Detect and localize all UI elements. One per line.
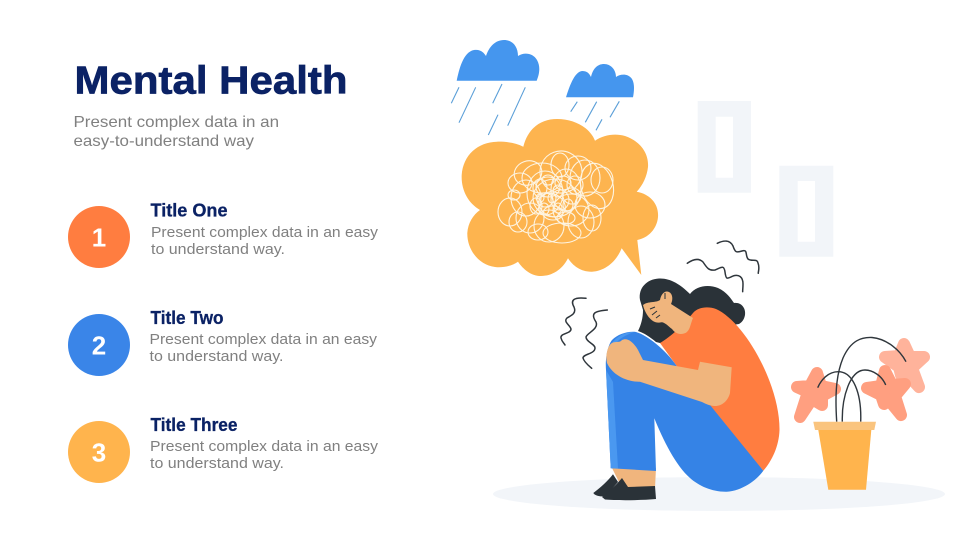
item 3 text: Present complex data in an easy [150,438,379,455]
stems [818,337,906,422]
item 1 text: Present complex data in an easy [151,224,379,241]
subtitle: easy-to-understand way [74,133,254,150]
item 3 [68,415,379,483]
item 2 text: Present complex data in an easy [150,331,378,348]
flower right [867,371,905,415]
number badge 1 [68,206,130,268]
front shoe [602,478,656,500]
leg [606,332,763,492]
torso [660,307,780,471]
number badge 1: 1 [92,222,106,252]
large rain cloud [451,40,539,135]
window frame left [698,101,751,193]
subtitle [74,114,279,150]
subtitle: Present complex data in an [74,114,279,131]
ground shadow [493,477,945,511]
item 3 text [150,415,379,472]
arm and hand [606,339,732,406]
potted plant [797,337,924,490]
item 1 text [150,200,379,258]
number badge 2 [68,314,130,376]
number badge 2: 2 [92,330,106,360]
item 2 [68,308,378,376]
item 1 [68,200,379,268]
number badge 3: 3 [92,438,106,468]
item 3 text: to understand way. [150,455,284,472]
pot body [818,430,871,490]
back shoe [593,474,618,496]
hair [638,278,745,345]
number badge 3 [68,421,130,483]
item 2 text: Title Two [150,308,224,328]
eye and face lines [650,293,665,318]
thought bubble [462,119,658,276]
pot rim [813,422,876,430]
item 2 text [150,308,378,365]
woman figure [593,278,780,500]
title: Mental Health [74,60,348,102]
shin highlight [606,370,618,468]
scribble [498,144,618,243]
flower left [797,373,835,417]
item 3 text: Title Three [150,415,238,435]
ankle [612,468,656,488]
worry squiggles [561,241,759,368]
flower top right [885,344,924,387]
knee highlight [609,332,634,348]
neck and face [643,291,693,334]
small rain cloud [566,64,634,130]
item 2 text: to understand way. [150,348,284,365]
window frame right [779,166,833,257]
item 1 text: Title One [150,200,228,220]
item 1 text: to understand way. [151,241,285,258]
